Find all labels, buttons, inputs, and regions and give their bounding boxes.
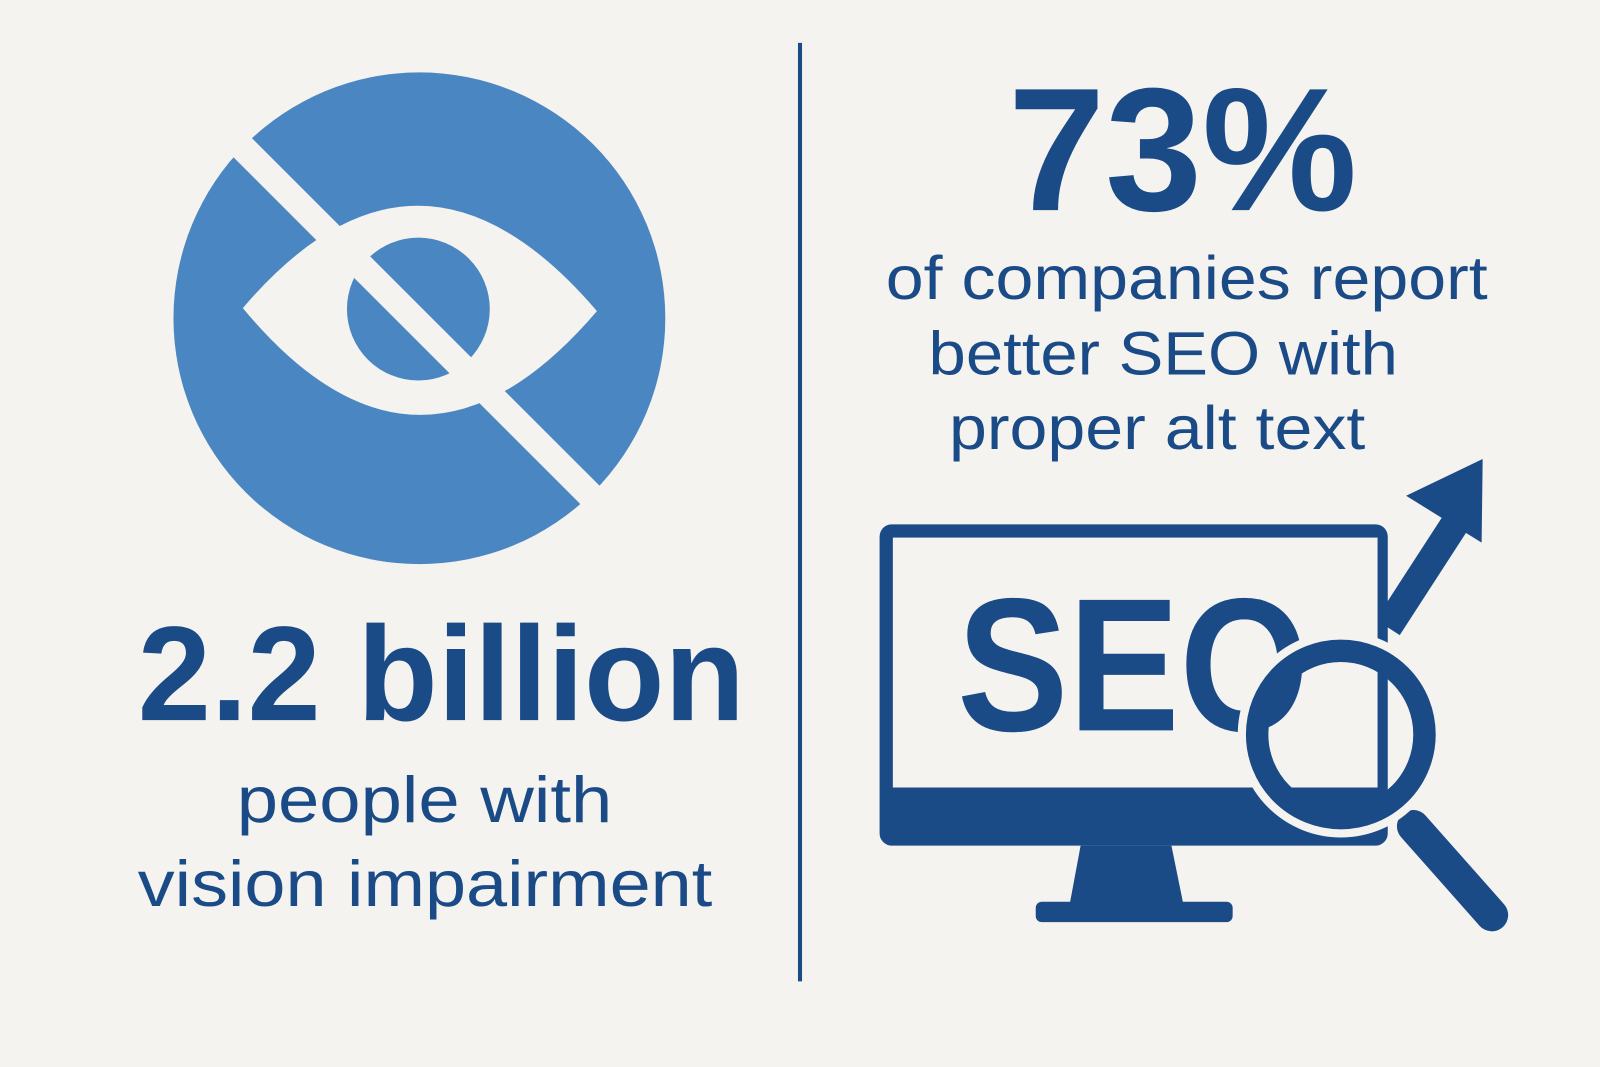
- text: companies report: [886, 244, 1488, 462]
- stat: 73%: 73%: [1008, 52, 1357, 248]
- stat: 2.2 billion: 2.2 billion: [138, 598, 745, 749]
- icon: magnifying glass: [1243, 637, 1492, 915]
- icon: SEO monitor: [880, 524, 1388, 922]
- text: companies report: better SEO with: [929, 319, 1398, 387]
- icon: SEO monitor: SEO: [957, 559, 1309, 771]
- icon: growth arrow: [1388, 459, 1483, 627]
- text: people with vision impairment: [138, 763, 712, 920]
- text: people with vision impairment: vision impairment: [138, 847, 712, 920]
- text: people with vision impairment: people with: [237, 763, 612, 836]
- divider: [798, 43, 802, 981]
- icon: crossed-out eye: [173, 72, 665, 564]
- text: companies report: proper alt text: [949, 394, 1365, 462]
- text: companies report: of companies report: [886, 244, 1488, 312]
